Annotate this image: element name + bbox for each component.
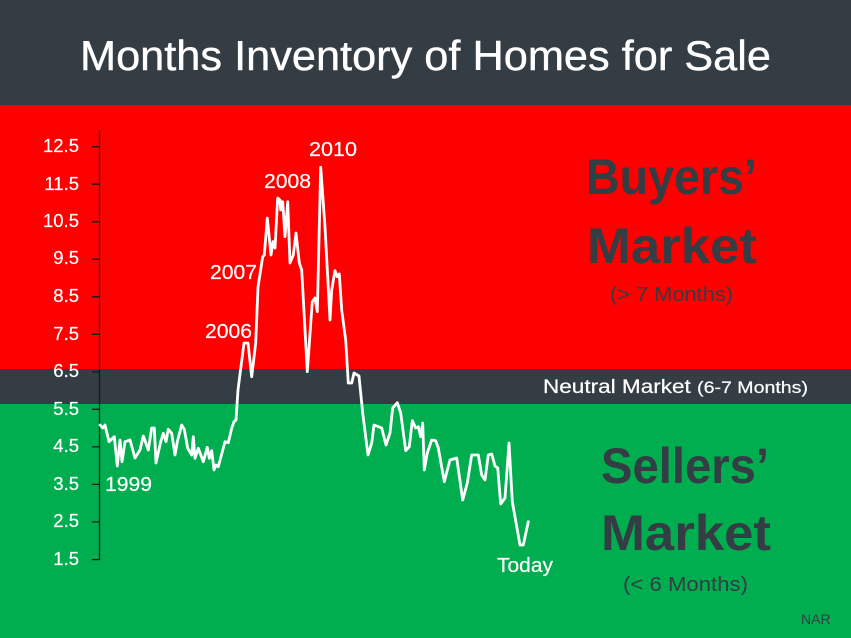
y axis labels: 7.5 <box>53 323 79 344</box>
year labels: Today <box>497 554 554 577</box>
y axis labels: 1.5 <box>53 548 79 569</box>
sellers market label: Market <box>601 505 771 561</box>
year labels <box>105 138 554 577</box>
y axis labels: 10.5 <box>43 210 79 231</box>
year labels: 2007 <box>210 261 257 284</box>
year labels: 2008 <box>264 170 311 193</box>
neutral market label: Neutral Market (6-7 Months) <box>543 377 808 398</box>
y axis labels: 4.5 <box>53 435 79 456</box>
buyers market label <box>586 149 757 306</box>
y axis labels: 9.5 <box>53 247 79 268</box>
y axis <box>92 130 100 560</box>
year labels: 1999 <box>105 473 152 496</box>
year labels: 2010 <box>309 138 357 161</box>
y axis labels: 8.5 <box>53 285 79 306</box>
sellers market label: (< 6 Months) <box>623 573 748 596</box>
y axis labels: 2.5 <box>53 510 79 531</box>
y axis labels: 11.5 <box>44 173 79 194</box>
line chart: months inventory <box>100 167 528 545</box>
year labels: 2006 <box>205 320 252 343</box>
y axis labels: 6.5 <box>53 360 79 381</box>
title: Months Inventory of Homes for Sale <box>80 32 771 79</box>
buyers market label: (> 7 Months) <box>610 283 733 306</box>
sellers market label <box>601 438 771 596</box>
y axis labels: 12.5 <box>43 135 79 156</box>
y axis labels: 5.5 <box>53 398 79 419</box>
sellers market label: Sellers’ <box>601 438 769 494</box>
source note: NAR <box>801 611 831 627</box>
buyers market label: Buyers’ <box>586 149 757 205</box>
buyers market label: Market <box>587 218 757 274</box>
y axis labels: 3.5 <box>53 473 79 494</box>
panel: sellers market band <box>0 404 851 638</box>
panel: buyers market band <box>0 105 851 369</box>
panel: neutral market band <box>0 369 851 404</box>
y axis labels <box>43 135 79 569</box>
title banner <box>0 0 851 105</box>
